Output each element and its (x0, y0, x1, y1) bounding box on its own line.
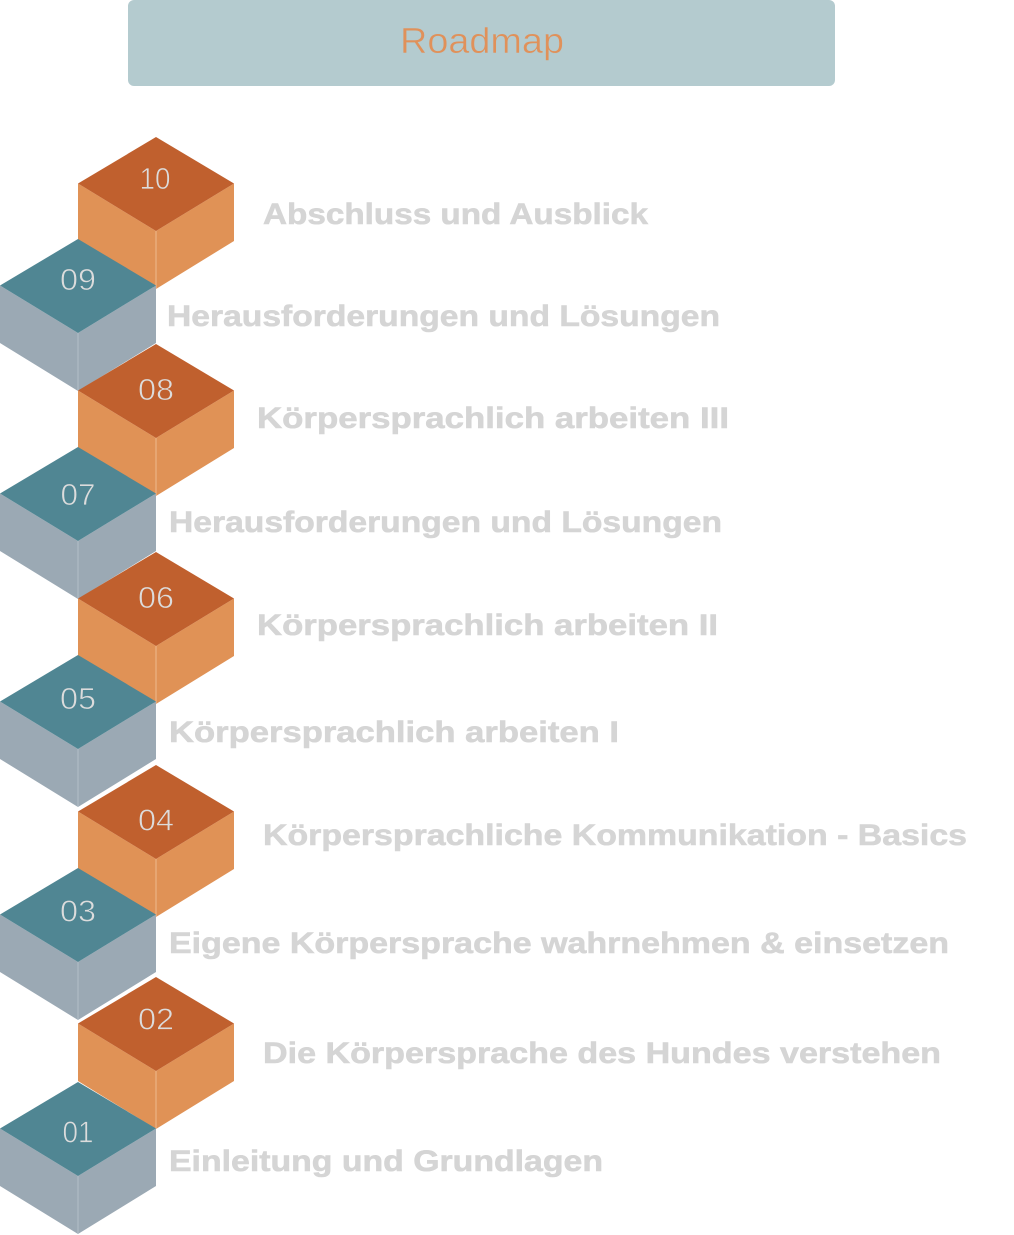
step 04 block: 04 (138, 802, 174, 838)
step 10 label: Abschluss und Ausblick (263, 198, 648, 231)
step 08 block (78, 344, 234, 496)
step 06 label: Körpersprachlich arbeiten II (257, 609, 718, 642)
step 09 block: 09 (60, 262, 96, 297)
step 07 label: Herausforderungen und Lösungen (169, 506, 722, 539)
step 01 label: Einleitung und Grundlagen (169, 1145, 603, 1178)
step 03 label: Eigene Körpersprache wahrnehmen & einsetzen (169, 927, 949, 960)
step 05 block: 05 (60, 681, 96, 716)
step 05 block (0, 655, 156, 807)
step 02 block (78, 977, 234, 1129)
title banner (128, 0, 835, 86)
step 10 block: 10 (140, 161, 170, 196)
step 02 label: Die Körpersprache des Hundes verstehen (263, 1037, 941, 1070)
step 04 label: Körpersprachliche Kommunikation - Basics (263, 819, 967, 852)
step 10 block (78, 137, 234, 289)
step 06 block: 06 (138, 580, 174, 615)
step 02 block: 02 (138, 1002, 174, 1036)
step 07 block: 07 (60, 477, 96, 512)
step 07 block (0, 447, 156, 599)
title banner: Roadmap (400, 20, 564, 61)
step 08 label: Körpersprachlich arbeiten III (257, 402, 729, 435)
step 04 block (78, 765, 234, 917)
step 06 block (78, 552, 234, 704)
step 09 block (0, 239, 156, 391)
step 09 label: Herausforderungen und Lösungen (167, 300, 720, 333)
step 03 block (0, 868, 156, 1020)
step 03 block: 03 (60, 894, 96, 928)
step 01 block (0, 1082, 156, 1234)
step 01 block: 01 (62, 1114, 94, 1150)
step 05 label: Körpersprachlich arbeiten I (169, 716, 619, 749)
step 08 block: 08 (138, 372, 174, 407)
